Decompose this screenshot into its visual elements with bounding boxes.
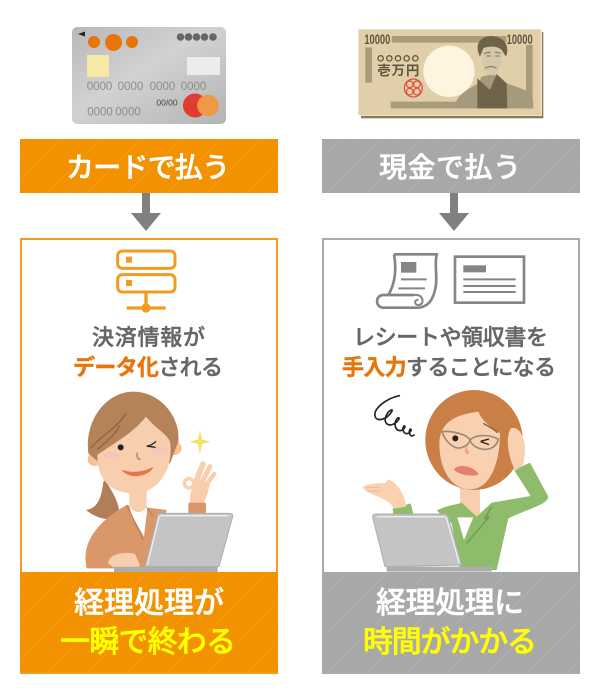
icon: stack of 10000 yen banknotes <box>358 29 543 118</box>
arrow: card heading to panel <box>131 193 161 231</box>
panel outline: card <box>21 239 277 673</box>
icon: server network <box>118 251 175 313</box>
illustration: troubled woman at laptop <box>362 390 548 572</box>
illustration: smiling woman at laptop <box>85 392 233 572</box>
result band: cash <box>322 572 580 672</box>
text: manual entry of receipts: 手入力することになる <box>342 355 556 380</box>
icon: credit card: 0000 <box>118 81 143 93</box>
heading: pay by cash: 現金で払う <box>379 152 521 183</box>
text: payment info becomes data: データ化される <box>73 355 223 380</box>
icon: credit card: 0000 <box>87 81 112 93</box>
panel: cash payment <box>322 139 580 673</box>
text: payment info becomes data: 決済情報が <box>92 325 205 350</box>
heading: pay by card <box>20 139 278 193</box>
arrow: cash heading to panel <box>439 193 469 231</box>
result band: cash: 時間がかかる <box>363 626 537 659</box>
icon: credit card: 0000 <box>150 81 175 93</box>
icon: credit card <box>72 27 226 124</box>
result band: cash: 経理処理に <box>376 587 524 620</box>
text: manual entry of receipts: レシートや領収書を <box>353 325 548 350</box>
panel outline: cash <box>323 239 579 673</box>
icon: stack of 10000 yen banknotes: 10000 <box>364 31 390 47</box>
icon: credit card: 0000 <box>87 106 113 118</box>
icon: credit card: 0000 <box>181 81 206 93</box>
icon: stack of 10000 yen banknotes: 壱万円 <box>377 62 419 78</box>
result band: card: 一瞬で終わる <box>60 626 236 659</box>
icon: receipt and business form <box>377 254 524 308</box>
icon: credit card: 00/00 <box>156 98 178 108</box>
icon: stack of 10000 yen banknotes: 10000 <box>507 31 533 47</box>
panel: card payment <box>20 139 278 673</box>
heading: pay by card: カードで払う <box>66 152 230 183</box>
heading: pay by cash <box>322 139 580 193</box>
icon: credit card: 0000 <box>115 106 141 118</box>
result band: card <box>20 572 278 672</box>
result band: card: 経理処理が <box>74 587 224 620</box>
